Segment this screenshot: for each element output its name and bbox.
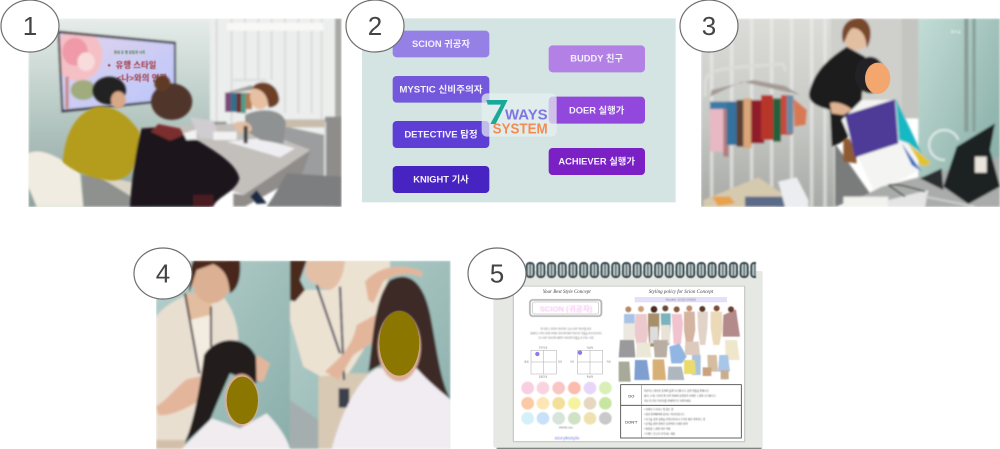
logo: 7 ways system: WAYS [505, 108, 548, 124]
positioning matrix right: 중성적 [587, 375, 593, 379]
fashion collage [619, 305, 740, 382]
type buttons: SCION 귀공자 [412, 38, 470, 49]
logo: 7 ways system [482, 93, 557, 138]
panel 1: consultation photo [28, 18, 342, 207]
panel 2: 7 ways system [362, 18, 676, 202]
do and don't table: • 캐쥬얼 느낌의 전문 복장 [644, 427, 671, 431]
notebook base [493, 271, 763, 449]
positioning matrix right: 곡선 [570, 360, 574, 364]
concept name plaque: SCION (귀공자) [540, 303, 593, 313]
concept name plaque [530, 300, 601, 316]
do and don't table: 하나 된 전신 이미지를 전체적으로 사용하세요 [644, 398, 692, 402]
do and don't table [621, 385, 741, 438]
concept description: 섬세하고 자연스럽게 꾸며낸 귀공자의 패션 이미지로 연출을 돋보이게 한다 [530, 331, 603, 335]
sign text on glass: 협의실 [951, 29, 961, 34]
slide text on screen: 유행 스타일 [116, 60, 156, 70]
spiral binding [525, 262, 756, 278]
panel 3: colour draping photo [701, 18, 1000, 207]
type buttons: ACHIEVER 실행가 [558, 155, 635, 166]
do and don't table: • 과해지 드러나는 핏 없는 옷 [644, 407, 674, 411]
positioning matrix left: 은은하게 [539, 346, 547, 350]
do and don't table: DON'T [625, 419, 638, 424]
privacy mask: right face [379, 311, 419, 376]
key point bar: Key point : 부드럽고 단아하게 [666, 298, 695, 302]
number badge 4 [134, 248, 192, 299]
type buttons [393, 31, 645, 193]
positioning matrix left: 경쾌 [524, 360, 528, 364]
panel 5: spiral style concept book [493, 262, 763, 449]
palette caption: PASTEL tone [559, 427, 574, 430]
concept description: 부드러운 이미지와 세련된 이미지의 연출을 추구하는 타입 [538, 336, 594, 340]
positioning matrix right: 여성적 [587, 346, 593, 350]
brand logo: storyinstyle [555, 435, 580, 441]
type buttons: MYSTIC 신비주의자 [399, 83, 483, 94]
number badge 5 [468, 248, 526, 299]
logo: 7 ways system: SYSTEM [493, 122, 548, 138]
colour palette [521, 382, 612, 425]
positioning matrix left: 차분 [558, 360, 563, 364]
do and don't table: • 자극을 유연 낮춰을 분위기하거나 구겨진 채로 착용하는 옷 [644, 417, 706, 421]
number badge 5: 5 [490, 258, 504, 288]
type buttons: KNIGHT 기사 [413, 173, 469, 184]
number badge 2 [346, 0, 404, 52]
slide text on screen [108, 49, 167, 83]
left page heading: Your Best Style Concept [543, 290, 591, 295]
panel 4: hair diagnosis photos [156, 253, 451, 449]
slide text on screen: <나>와의 연관 [117, 73, 167, 83]
type buttons: BUDDY 친구 [570, 53, 623, 64]
privacy mask: left face [227, 377, 258, 424]
key point bar [635, 297, 727, 302]
positioning matrix right: 직선 [607, 360, 611, 364]
positioning matrix left [524, 346, 563, 379]
slide text on screen: 현대 유 행 칼럼과 나의 [114, 49, 145, 54]
positioning matrix right [570, 346, 611, 379]
concept description: 위 다움고 단아한 이미지와 고급스러운 이미지를 강조 [540, 326, 592, 330]
number badge 2: 2 [368, 11, 382, 41]
do and don't table: 컬러, 소재, 디자인 중 보온 연애의 유행감이 가벼운 느낌의 코디합니다 [644, 393, 716, 397]
number badge 4: 4 [156, 258, 170, 288]
positioning matrix left: 강렬하게 [539, 375, 547, 379]
do and don't table: 차분하고 정숙한 유행의 블랜 코디합니다. 유연 연출을 완합니다 [644, 388, 710, 392]
number badge 3: 3 [702, 11, 716, 41]
slide text on screen: • [108, 60, 111, 70]
do and don't table: DO [628, 393, 634, 398]
number badge 1: 1 [23, 11, 37, 41]
privacy mask: face [865, 63, 890, 94]
right page heading: Styling policy for Scion Concept [649, 290, 714, 295]
seated clients [63, 75, 239, 207]
number badge 3 [680, 0, 738, 52]
do and don't table: • 강한 원색배색의 강사는 이미지입니다 [644, 412, 685, 416]
concept description [530, 326, 603, 340]
type buttons: DOER 실행가 [569, 104, 625, 115]
do and don't table: • 유행을 쫓아 옷의로 유행적인 오래된 품목 [644, 422, 689, 426]
type buttons: DETECTIVE 탐정 [404, 128, 478, 139]
do and don't table: • 브랜드 로고가 부각되는 제품 [644, 432, 676, 436]
number badge 1 [1, 0, 59, 52]
